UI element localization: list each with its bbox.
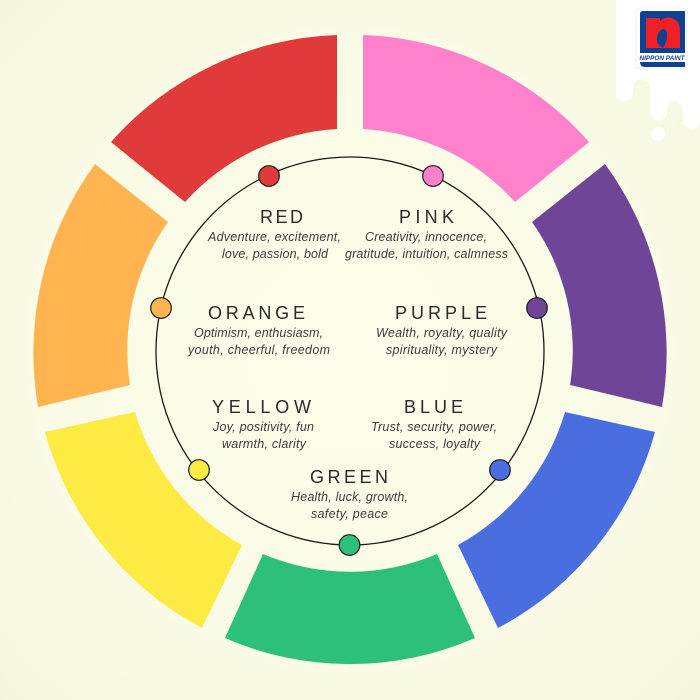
- segment: red: [111, 35, 337, 202]
- text block: orange: Optimism, enthusiasm,: [194, 326, 323, 340]
- segment: orange: [33, 164, 168, 407]
- text block: blue: Trust, security, power,: [371, 420, 497, 434]
- text block: yellow: warmth, clarity: [222, 437, 307, 451]
- text block: red: Adventure, excitement,: [207, 230, 341, 244]
- text block: pink: PINK: [399, 207, 454, 227]
- text block: orange: youth, cheerful, freedom: [187, 343, 330, 357]
- dot: blue: [490, 460, 510, 480]
- dot: orange: [151, 298, 171, 318]
- text block: yellow: YELLOW: [212, 397, 311, 417]
- text block: orange: [187, 303, 330, 357]
- text block: purple: [376, 303, 508, 357]
- text block: yellow: [212, 397, 314, 451]
- colour marker dots: [151, 166, 547, 555]
- segment: green: [225, 554, 475, 664]
- logo wordmark: NIPPON PAINT: [640, 55, 686, 62]
- text block: purple: spirituality, mystery: [386, 343, 498, 357]
- text block: pink: gratitude, intuition, calmness: [345, 247, 508, 261]
- logo: Nippon Paint: [636, 8, 687, 69]
- text block: pink: Creativity, innocence,: [365, 230, 487, 244]
- text block: green: GREEN: [310, 467, 388, 487]
- text block: purple: Wealth, royalty, quality: [376, 326, 508, 340]
- segment: yellow: [45, 412, 242, 628]
- text block: green: Health, luck, growth,: [291, 490, 408, 504]
- text block: blue: BLUE: [404, 397, 463, 417]
- segment: pink: [363, 35, 589, 202]
- text block: green: [291, 467, 408, 521]
- dot: pink: [423, 166, 443, 186]
- segment: purple: [532, 164, 667, 407]
- paint droplet: [651, 127, 665, 141]
- segment: blue: [458, 412, 655, 628]
- dot: green: [339, 535, 360, 555]
- text block: purple: PURPLE: [395, 303, 487, 323]
- dot: red: [259, 166, 279, 186]
- dot: purple: [527, 298, 547, 318]
- text block: yellow: Joy, positivity, fun: [212, 420, 314, 434]
- inner circle outline: [156, 157, 544, 545]
- text block: red: [207, 207, 341, 261]
- text block: red: love, passion, bold: [222, 247, 329, 261]
- logo bottom bar: [640, 62, 685, 67]
- text block: pink: [345, 207, 508, 261]
- text block: blue: success, loyalty: [389, 437, 481, 451]
- text block: green: safety, peace: [311, 507, 388, 521]
- text block: orange: ORANGE: [208, 303, 305, 323]
- text block: blue: [371, 397, 497, 451]
- logo red n: [646, 17, 680, 48]
- text block: red: RED: [260, 207, 303, 227]
- logo blue panel: [640, 11, 685, 53]
- dot: yellow: [189, 460, 209, 480]
- white paint drip: [616, 0, 700, 141]
